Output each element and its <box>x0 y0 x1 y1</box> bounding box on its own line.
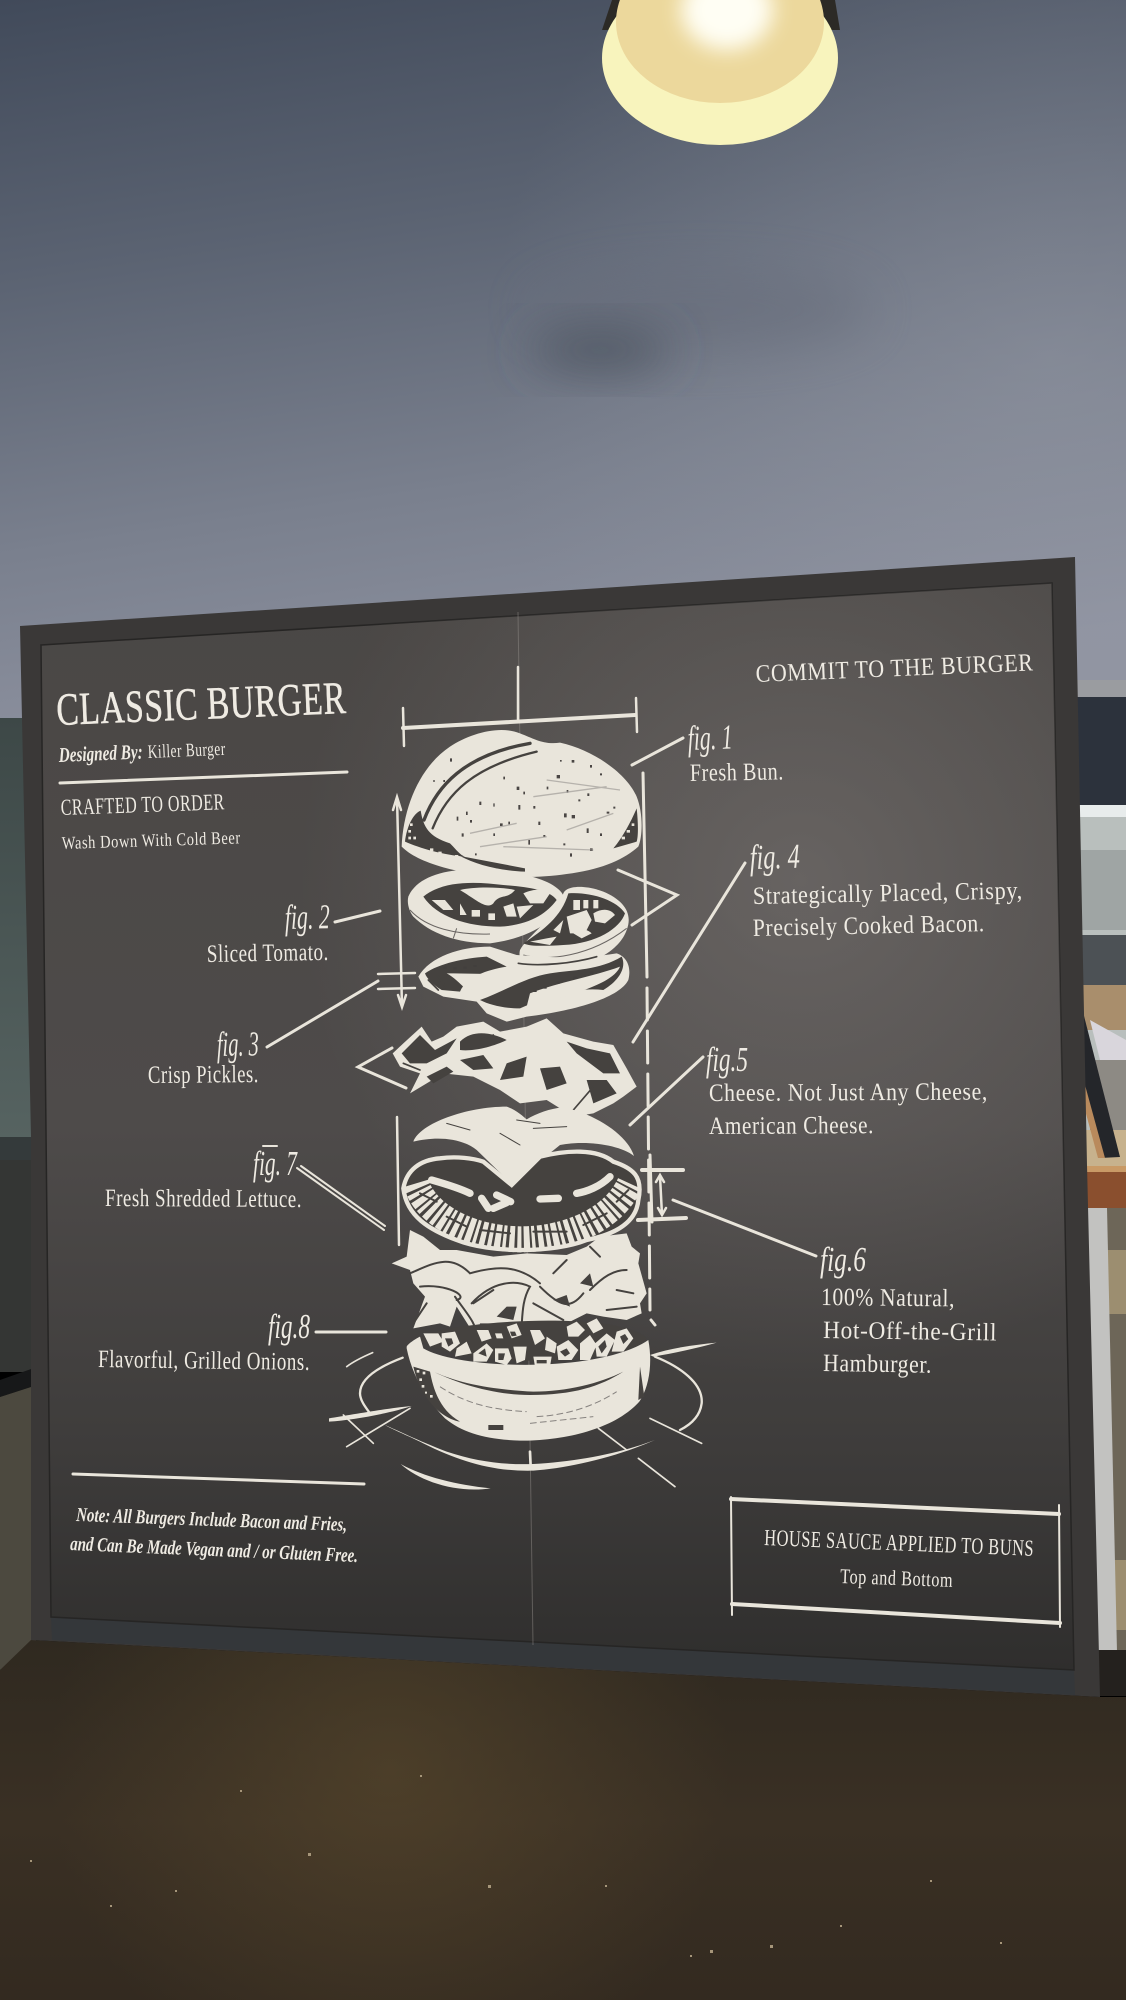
icon: lettuce leaf <box>393 1018 637 1117</box>
board panel <box>41 583 1074 1670</box>
callout: house sauce box: Top and Bottom <box>840 1564 954 1592</box>
footnote <box>70 1474 364 1567</box>
fig 3 label <box>148 1024 259 1089</box>
leader: fig 1 <box>632 738 683 765</box>
title: CLASSIC BURGER <box>55 672 347 735</box>
fig 8 label <box>98 1307 310 1376</box>
plate motion lines <box>329 1343 717 1489</box>
leader: fig 2 <box>335 911 380 922</box>
panel: title block <box>55 672 347 853</box>
icon: cheese slice <box>413 1107 634 1184</box>
crafted to order: CRAFTED TO ORDER <box>60 789 225 820</box>
fig 5 label: Cheese. Not Just Any Cheese, <box>709 1079 988 1107</box>
wall background <box>0 0 1126 760</box>
fig 6 label: Hot-Off-the-Grill <box>823 1317 997 1346</box>
fig 3 label: fig. 3 <box>216 1024 259 1064</box>
designed by credit: Designed By: <box>57 739 143 767</box>
fig 4 label <box>749 837 1023 942</box>
fig 3 label: Crisp Pickles. <box>148 1061 259 1089</box>
fig 5 label: American Cheese. <box>709 1112 874 1140</box>
fig 2 label: fig. 2 <box>284 897 330 937</box>
fig 1 label: Fresh Bun. <box>690 758 784 787</box>
icon: burger patty <box>403 1152 640 1250</box>
ceiling lamp <box>602 0 840 145</box>
fig 7 label <box>105 1144 302 1213</box>
fig 4 label: Strategically Placed, Crispy, <box>753 877 1023 910</box>
leader: fig 5 <box>630 1057 703 1125</box>
leader: fig 4 <box>633 863 745 1042</box>
fig 2 label <box>207 897 330 968</box>
leader: lettuce bracket <box>358 1048 406 1088</box>
fig 6 label <box>820 1240 997 1379</box>
leader: fig 7 <box>297 1166 385 1230</box>
board frame <box>20 557 1100 1697</box>
dimension lines and leaders <box>263 667 816 1332</box>
fig 4 label: Precisely Cooked Bacon. <box>753 910 985 942</box>
fig 8 label: fig.8 <box>268 1307 310 1346</box>
fig 8 label: Flavorful, Grilled Onions. <box>98 1346 310 1376</box>
leader: fig 6 <box>673 1200 816 1256</box>
burger illustration lower layers <box>329 1107 717 1489</box>
fig 1 label <box>687 717 784 787</box>
fig 7 label: fig. 7 <box>253 1144 298 1183</box>
designed by credit: Killer Burger <box>147 739 226 763</box>
fig 6 label: Hamburger. <box>823 1350 932 1379</box>
floor <box>0 1640 1126 2000</box>
icon: shredded lettuce <box>392 1230 647 1343</box>
leader: tomato bracket <box>618 870 677 925</box>
icon: pickles <box>418 947 629 1022</box>
fig 5 label <box>706 1040 988 1140</box>
burger illustration upper layers <box>393 730 642 1117</box>
icon: grilled onions <box>417 1321 647 1361</box>
left side wall and floor <box>0 718 36 1670</box>
footnote: Note: All Burgers Include Bacon and Fries, <box>75 1504 347 1536</box>
arrow: patty thickness <box>656 1175 666 1215</box>
fig 6 label: fig.6 <box>820 1240 866 1279</box>
tagline: COMMIT TO THE BURGER <box>755 649 1034 688</box>
icon: bottom bun <box>407 1337 650 1441</box>
footnote: and Can Be Made Vegan and / or Gluten Free. <box>70 1533 358 1567</box>
fig 1 label: fig. 1 <box>687 717 733 758</box>
leader: fig 8 <box>316 1330 386 1334</box>
fig 5 label: fig.5 <box>706 1040 748 1079</box>
right side kitchen view <box>1070 680 1126 1696</box>
fig 6 label: 100% Natural, <box>821 1284 955 1312</box>
icon: top bun <box>402 730 642 877</box>
fig 4 label: fig. 4 <box>749 837 800 877</box>
callout: house sauce box <box>731 1497 1060 1627</box>
arrow: left height arrow <box>393 797 406 1007</box>
wash down with cold beer: Wash Down With Cold Beer <box>61 827 241 853</box>
icon: tomato slices <box>408 869 629 969</box>
leader: fig 3 <box>267 981 378 1047</box>
designed by credit <box>57 739 226 767</box>
fig 7 label: Fresh Shredded Lettuce. <box>105 1185 302 1213</box>
fig 2 label: Sliced Tomato. <box>207 939 329 968</box>
